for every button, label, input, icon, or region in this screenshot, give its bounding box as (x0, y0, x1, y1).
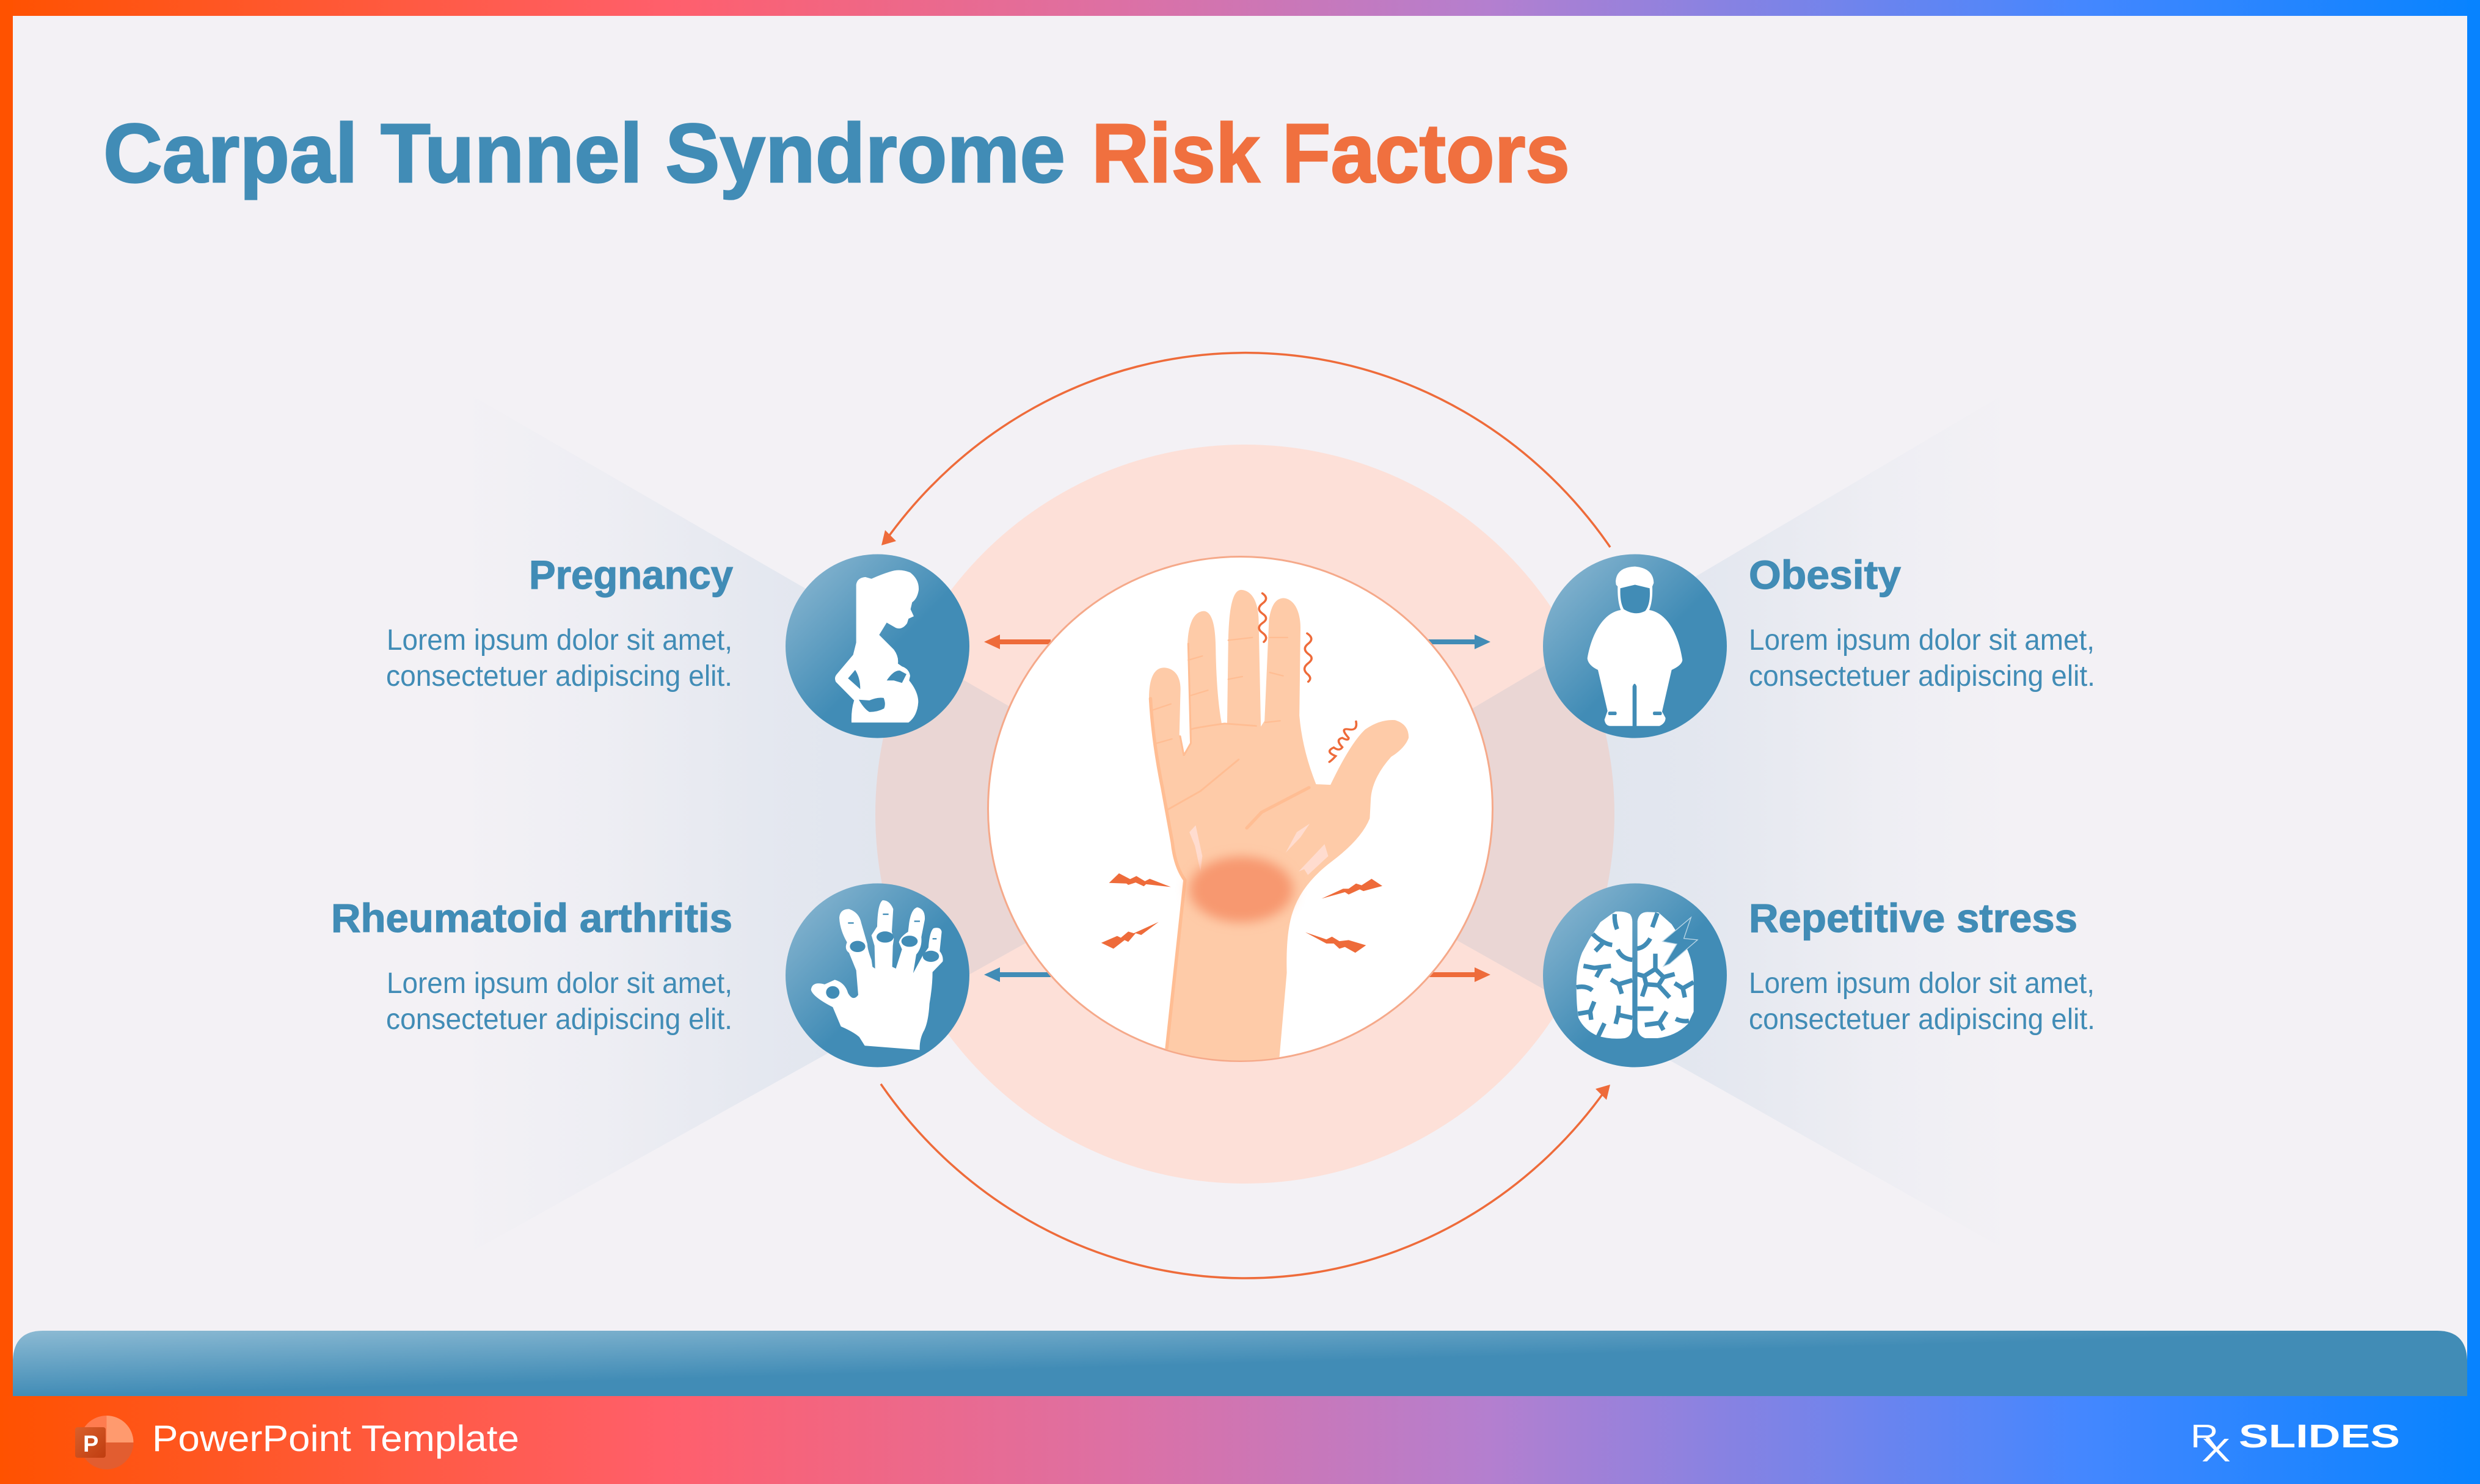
arrow: bottom left blue (984, 967, 1051, 982)
arc arrow: bottom (881, 1084, 1610, 1278)
text block: pregnancy: Pregnancy (529, 552, 733, 597)
halo circle (875, 445, 1614, 1184)
tingling squiggles (1259, 593, 1356, 762)
text block: rheumatoid arthritis: Rheumatoid arthritis (331, 895, 732, 940)
text block: obesity: consectetuer adipiscing elit. (1749, 660, 2095, 693)
text block: repetitive stress: consectetuer adipiscing elit. (1749, 1003, 2095, 1036)
text block: obesity: Lorem ipsum dolor sit amet, (1749, 624, 2095, 657)
RxSlides logo: X (2201, 1432, 2231, 1469)
text block: rheumatoid arthritis: consectetuer adipiscing elit. (386, 1003, 732, 1036)
highlights (1189, 824, 1328, 875)
text block: pregnancy: consectetuer adipiscing elit. (386, 660, 732, 693)
fan: right (1274, 391, 2010, 1252)
text block: obesity (1749, 552, 2095, 693)
title: Carpal Tunnel Syndrome (103, 107, 1065, 200)
arrow: top right blue (1423, 635, 1490, 649)
text block: repetitive stress: Repetitive stress (1749, 895, 2077, 940)
arrow: top left orange (984, 635, 1051, 649)
footer blue band (13, 1331, 2467, 1396)
creases and shaded edge (1150, 638, 1309, 1048)
text block: rheumatoid arthritis: Lorem ipsum dolor sit amet, (387, 967, 732, 1000)
text block: repetitive stress: Lorem ipsum dolor sit amet, (1749, 967, 2095, 1000)
RxSlides logo (2190, 1418, 2400, 1469)
fan: left (464, 391, 1216, 1256)
title: Risk Factors (1092, 107, 1570, 200)
arrow: bottom right orange (1423, 967, 1490, 982)
RxSlides logo: SLIDES (2239, 1418, 2400, 1455)
icon: rheumatoid hand (786, 883, 969, 1068)
icon: PowerPoint logo: P (83, 1431, 98, 1457)
hand silhouette (1149, 590, 1409, 1062)
footer label: PowerPoint Template (152, 1418, 519, 1459)
icon: obesity (1543, 555, 1727, 738)
wrist pain glow (1189, 856, 1293, 922)
central white circle (988, 557, 1493, 1061)
text block: repetitive stress (1749, 895, 2095, 1036)
title (103, 107, 1570, 200)
text block: rheumatoid arthritis (331, 895, 732, 1036)
hand illustration (1101, 590, 1409, 1062)
icon: pregnancy (786, 555, 969, 738)
text block: pregnancy: Lorem ipsum dolor sit amet, (387, 624, 732, 657)
arc arrow: top (881, 353, 1610, 547)
icon: brain under repetitive stress (1543, 883, 1727, 1068)
icon: PowerPoint logo (75, 1416, 133, 1469)
text block: pregnancy (386, 552, 733, 693)
text block: obesity: Obesity (1749, 552, 1901, 597)
footer gradient bar (0, 1396, 2480, 1484)
pain bolts (1101, 873, 1382, 953)
RxSlides logo: R (2190, 1418, 2219, 1455)
